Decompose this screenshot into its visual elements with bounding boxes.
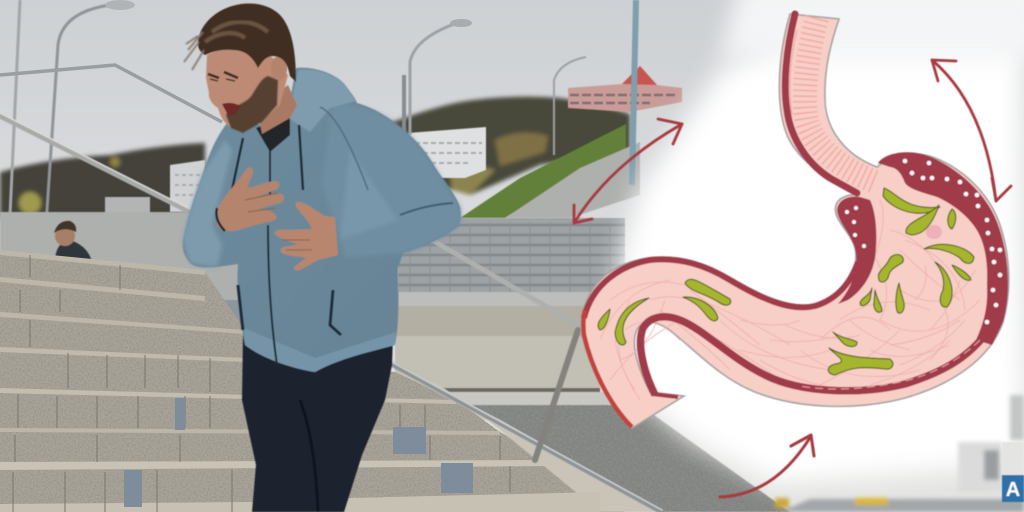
arrows bbox=[574, 60, 1011, 497]
white vignette behind stomach bbox=[618, 32, 1024, 484]
hair bbox=[198, 3, 296, 82]
stairs bbox=[0, 250, 660, 512]
upper hand bbox=[216, 167, 284, 231]
pylorus red edge bbox=[583, 310, 632, 427]
esophagus muscle wall bbox=[785, 14, 857, 193]
distant street bottom right bbox=[775, 395, 1024, 512]
arrow: upper left double-headed bbox=[574, 119, 682, 223]
stair railing bbox=[0, 113, 662, 512]
bile droplets bbox=[598, 188, 974, 375]
buildings bbox=[105, 66, 682, 215]
background hills bbox=[0, 97, 630, 218]
ear bbox=[271, 56, 287, 80]
eyes bbox=[208, 72, 238, 78]
pale haze at top right bbox=[720, 0, 1024, 60]
arrow: bottom curved bbox=[720, 435, 814, 497]
cardia muscle bbox=[837, 197, 876, 304]
inner fold lines bbox=[600, 200, 980, 400]
concrete walls bbox=[0, 212, 790, 512]
hoodie bbox=[183, 68, 461, 372]
stomach body bbox=[581, 14, 1009, 428]
mucosal glands bbox=[845, 159, 1002, 324]
greater curvature wall bbox=[641, 317, 985, 395]
upper handrail far bbox=[0, 65, 222, 122]
sore spot bbox=[926, 225, 942, 239]
stomach illustration bbox=[581, 14, 1009, 428]
mouth bbox=[222, 103, 240, 115]
fundus muscle wall bbox=[878, 152, 1008, 345]
grass embankment bbox=[460, 124, 626, 218]
face bbox=[206, 48, 288, 132]
man clutching chest bbox=[183, 3, 461, 512]
person in background bbox=[54, 221, 92, 262]
lower hand bbox=[275, 202, 338, 271]
lesser curvature wall bbox=[584, 259, 858, 318]
neck bbox=[257, 85, 297, 134]
road sign: A bbox=[1006, 479, 1020, 501]
trousers bbox=[242, 335, 393, 512]
beard bbox=[226, 76, 278, 133]
lamp posts bbox=[10, 0, 636, 255]
arrow: upper right double-headed bbox=[932, 60, 1011, 201]
road sign bbox=[1002, 442, 1024, 502]
esophagus ridges bbox=[805, 18, 875, 182]
